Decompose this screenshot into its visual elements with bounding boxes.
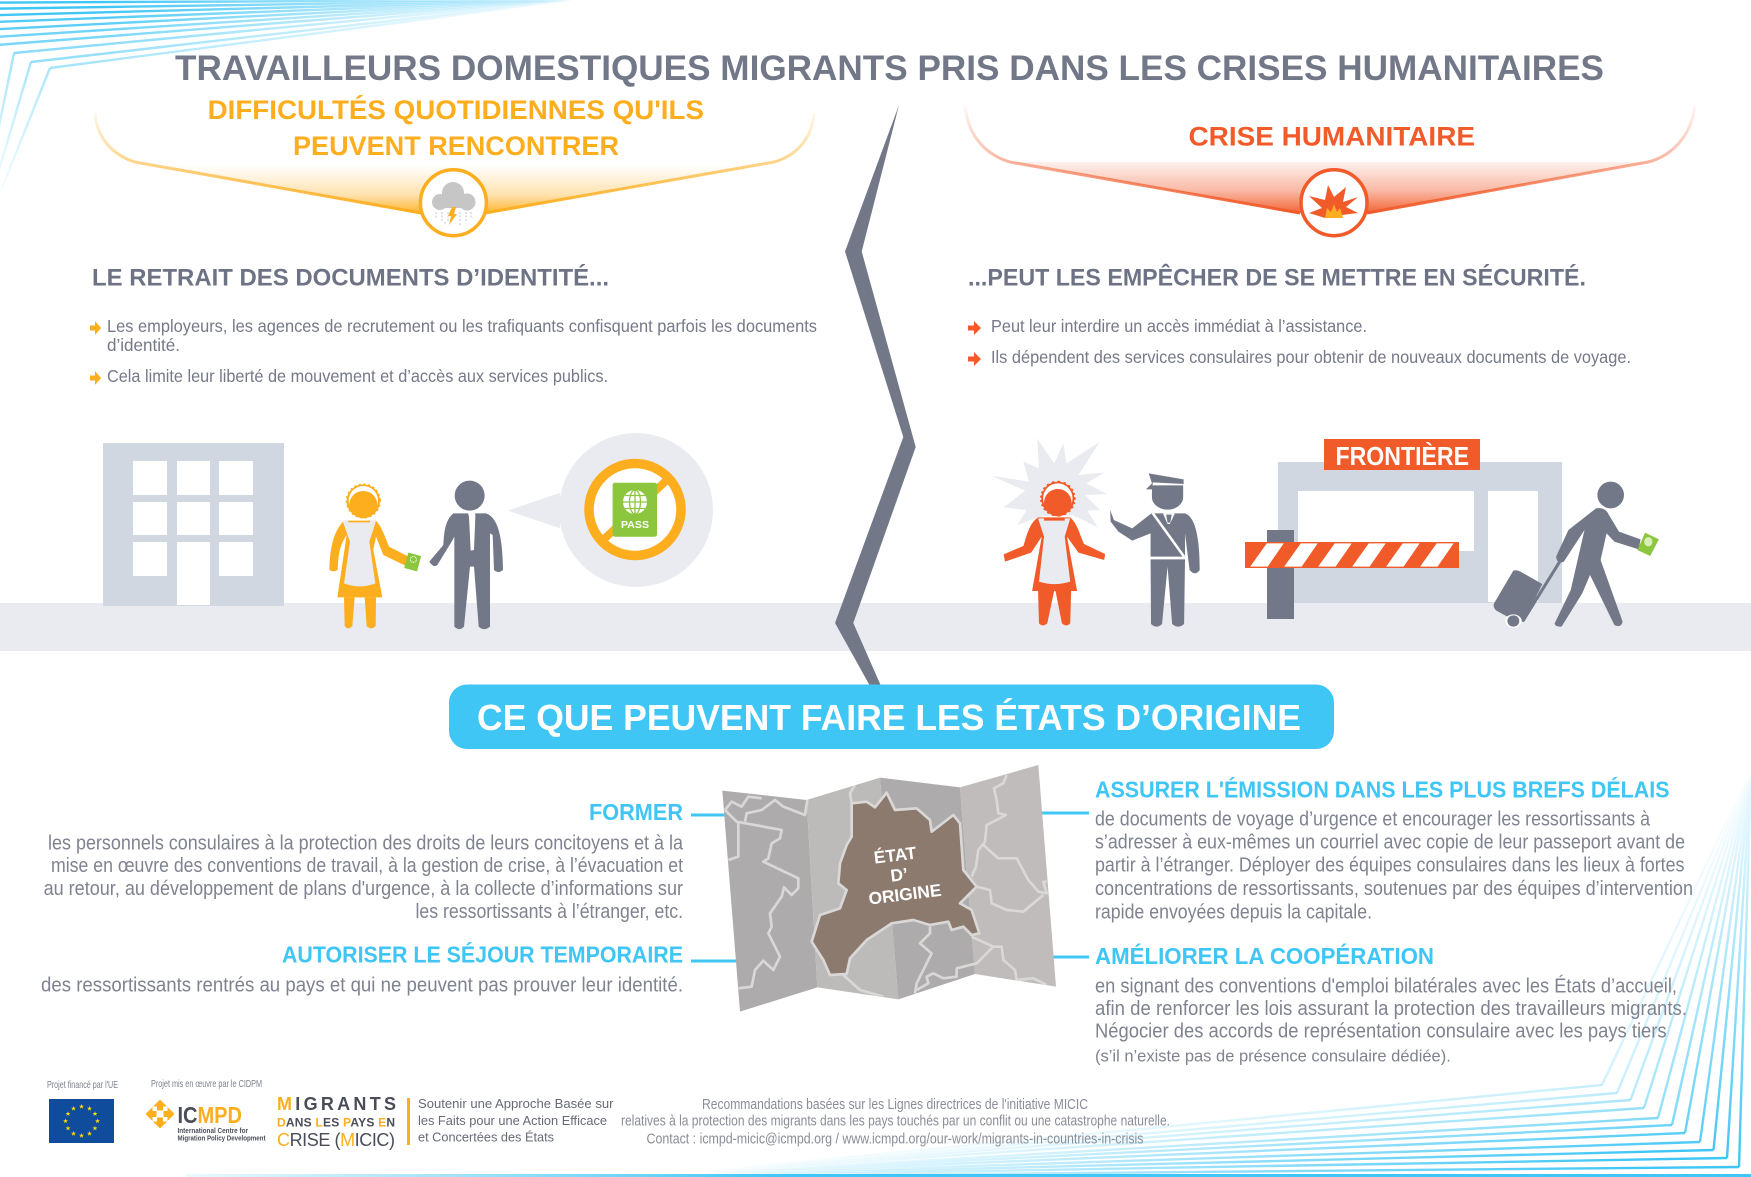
illustration: traveller with suitcase xyxy=(1494,482,1659,628)
footer: divider and tagline: les Faits pour une Action Efficace xyxy=(418,1113,607,1128)
footer: MICIC logo xyxy=(277,1094,396,1150)
footer: divider and tagline: Soutenir une Approche Basée sur xyxy=(418,1096,614,1111)
footer: divider and tagline: et Concertées des États xyxy=(418,1130,554,1145)
illustration: border officer xyxy=(1110,473,1200,627)
paragraph: issuance xyxy=(1095,809,1693,923)
footer: sources: Recommandations basées sur les Lignes directrices de l'initiative MICIC xyxy=(702,1096,1088,1113)
footer: ICMPD logo xyxy=(146,1078,266,1143)
footer: sources: relatives à la protection des migrants dans les pays touchés par un conflit ou une catastrophe naturelle. xyxy=(621,1112,1170,1130)
illustration: barrier xyxy=(1245,530,1459,619)
text block: issuance xyxy=(1095,776,1693,923)
text block: cooperation xyxy=(1095,942,1687,1066)
paragraph: issuance: partir à l’étranger. Déployer des équipes consulaires dans les lieux à fortes xyxy=(1095,855,1684,877)
lightning separator xyxy=(835,105,916,686)
bullet text 1 xyxy=(107,316,817,355)
bullet text 1: Les employeurs, les agences de recrutement ou les trafiquants confisquent parfois les documents xyxy=(107,316,817,336)
decoration: bottom-right blue lines xyxy=(186,770,1751,1177)
paragraph: former xyxy=(44,832,684,923)
text block: safety xyxy=(968,264,1631,367)
paragraph: issuance: s’adresser à eux-mêmes un courriel avec copie de leur passeport avant de xyxy=(1095,831,1685,853)
arrow bullet 1 xyxy=(90,321,101,335)
bullet text 1: d’identité. xyxy=(107,335,180,355)
paragraph: temporary stay: des ressortissants rentrés au pays et qui ne peuvent pas prouver leur identité. xyxy=(41,975,683,997)
panel: humanitarian crisis header xyxy=(965,105,1695,236)
paragraph: cooperation xyxy=(1095,975,1687,1066)
icon: ICMPD arrows xyxy=(146,1100,174,1128)
arrow bullet 3 xyxy=(968,321,981,335)
icon: crossed passport xyxy=(589,464,681,556)
paragraph: former: mise en œuvre des conventions de travail, à la gestion de crise, à l’évacuation et xyxy=(51,855,683,877)
paragraph: former: au retour, au développement de plans d'urgence, à la collecte d’informations sur xyxy=(44,878,683,900)
paragraph: cooperation: afin de renforcer les lois assurant la protection des travailleurs migrants. xyxy=(1095,998,1687,1020)
footer: MICIC logo: CRISE (MICIC) xyxy=(277,1130,395,1150)
footer: ICMPD logo: Migration Policy Development xyxy=(178,1136,266,1143)
heading: daily difficulties line 1: DIFFICULTÉS QUOTIDIENNES QU'ILS xyxy=(208,94,704,125)
ground band xyxy=(0,603,1751,651)
illustration: employer xyxy=(429,481,503,629)
illustration: starburst xyxy=(991,438,1107,527)
paragraph: former: les ressortissants à l’étranger, etc. xyxy=(416,901,683,923)
heading: cooperation: AMÉLIORER LA COOPÉRATION xyxy=(1095,942,1434,969)
map label xyxy=(863,840,942,909)
subheading: identity documents: LE RETRAIT DES DOCUMENTS D’IDENTITÉ... xyxy=(92,264,609,292)
subheading: safety: ...PEUT LES EMPÊCHER DE SE METTRE EN SÉCURITÉ. xyxy=(968,264,1586,292)
paragraph: issuance: de documents de voyage d’urgence et encourager les ressortissants à xyxy=(1095,809,1651,831)
paragraph: cooperation: (s’il n’existe pas de présence consulaire dédiée). xyxy=(1095,1047,1451,1066)
speech bubble with prohibited passport xyxy=(508,433,713,587)
map label: D’ xyxy=(889,864,909,886)
map label: ÉTAT xyxy=(873,843,918,868)
icon: EU flag xyxy=(49,1099,114,1143)
panel: daily difficulties header xyxy=(95,94,814,236)
paragraph: issuance: concentrations de ressortissants, soutenues par des équipes d’intervention xyxy=(1095,878,1693,900)
footer: divider and tagline xyxy=(407,1096,614,1145)
illustration: domestic worker handing passport xyxy=(329,484,421,628)
footer: sources: Contact : icmpd-micic@icmpd.org / www.icmpd.org/our-work/migrants-in-countries-in-crisis xyxy=(646,1130,1144,1148)
footer: MICIC logo: DANS LES PAYS EN xyxy=(277,1116,395,1130)
paragraph: former: les personnels consulaires à la protection des droits de leurs concitoyens et à la xyxy=(48,832,684,854)
icon: explosion xyxy=(1301,170,1367,236)
footer: funding credit xyxy=(47,1079,118,1143)
map: state of origin xyxy=(722,765,1056,1012)
heading: former: FORMER xyxy=(589,799,683,825)
footer: ICMPD logo: ICMPD xyxy=(178,1102,242,1128)
paragraph: cooperation: Négocier des accords de représentation consulaire avec les pays tiers xyxy=(1095,1021,1667,1043)
decoration: top-left blue lines xyxy=(0,0,572,268)
heading: daily difficulties line 2: PEUVENT RENCONTRER xyxy=(293,131,619,161)
banner: what origin states can do: CE QUE PEUVENT FAIRE LES ÉTATS D’ORIGINE xyxy=(477,697,1301,738)
footer: ICMPD logo: International Centre for xyxy=(178,1128,248,1135)
connector lines xyxy=(691,812,1089,962)
text block: former xyxy=(44,799,684,923)
footer: funding credit: Projet financé par l'UE xyxy=(47,1079,118,1091)
heading: humanitarian crisis: CRISE HUMANITAIRE xyxy=(1188,122,1475,152)
icon: storm cloud xyxy=(420,170,486,236)
text block: identity documents xyxy=(90,264,817,386)
paragraph: issuance: rapide envoyées depuis la capitale. xyxy=(1095,901,1372,923)
bullet text 4: Ils dépendent des services consulaires pour obtenir de nouveaux documents de voyage. xyxy=(991,347,1631,367)
illustration: border building xyxy=(1278,439,1562,603)
banner: what origin states can do xyxy=(449,684,1334,749)
illustration: domestic worker in crisis xyxy=(1004,482,1105,625)
text block: temporary stay xyxy=(41,941,683,997)
arrow bullet 2 xyxy=(90,371,101,385)
footer: MICIC logo: MIGRANTS xyxy=(277,1094,396,1114)
icon: crossed passport: PASS xyxy=(621,519,649,531)
sign: frontière: FRONTIÈRE xyxy=(1336,441,1469,471)
bullet text 3: Peut leur interdire un accès immédiat à l’assistance. xyxy=(991,316,1367,336)
footer: sources xyxy=(621,1096,1170,1148)
heading: issuance: ASSURER L'ÉMISSION DANS LES PLUS BREFS DÉLAIS xyxy=(1095,776,1670,803)
footer: ICMPD logo: Projet mis en œuvre par le CIDPM xyxy=(151,1078,262,1090)
bullet text 2: Cela limite leur liberté de mouvement et d’accès aux services publics. xyxy=(107,366,608,386)
title: TRAVAILLEURS DOMESTIQUES MIGRANTS PRIS DANS LES CRISES HUMANITAIRES xyxy=(175,49,1604,88)
paragraph: cooperation: en signant des conventions d'emploi bilatérales avec les États d’accueil, xyxy=(1095,975,1677,998)
arrow bullet 4 xyxy=(968,352,981,366)
illustration: building xyxy=(103,443,284,606)
heading: temporary stay: AUTORISER LE SÉJOUR TEMPORAIRE xyxy=(282,941,683,968)
map label: ORIGINE xyxy=(867,880,942,909)
